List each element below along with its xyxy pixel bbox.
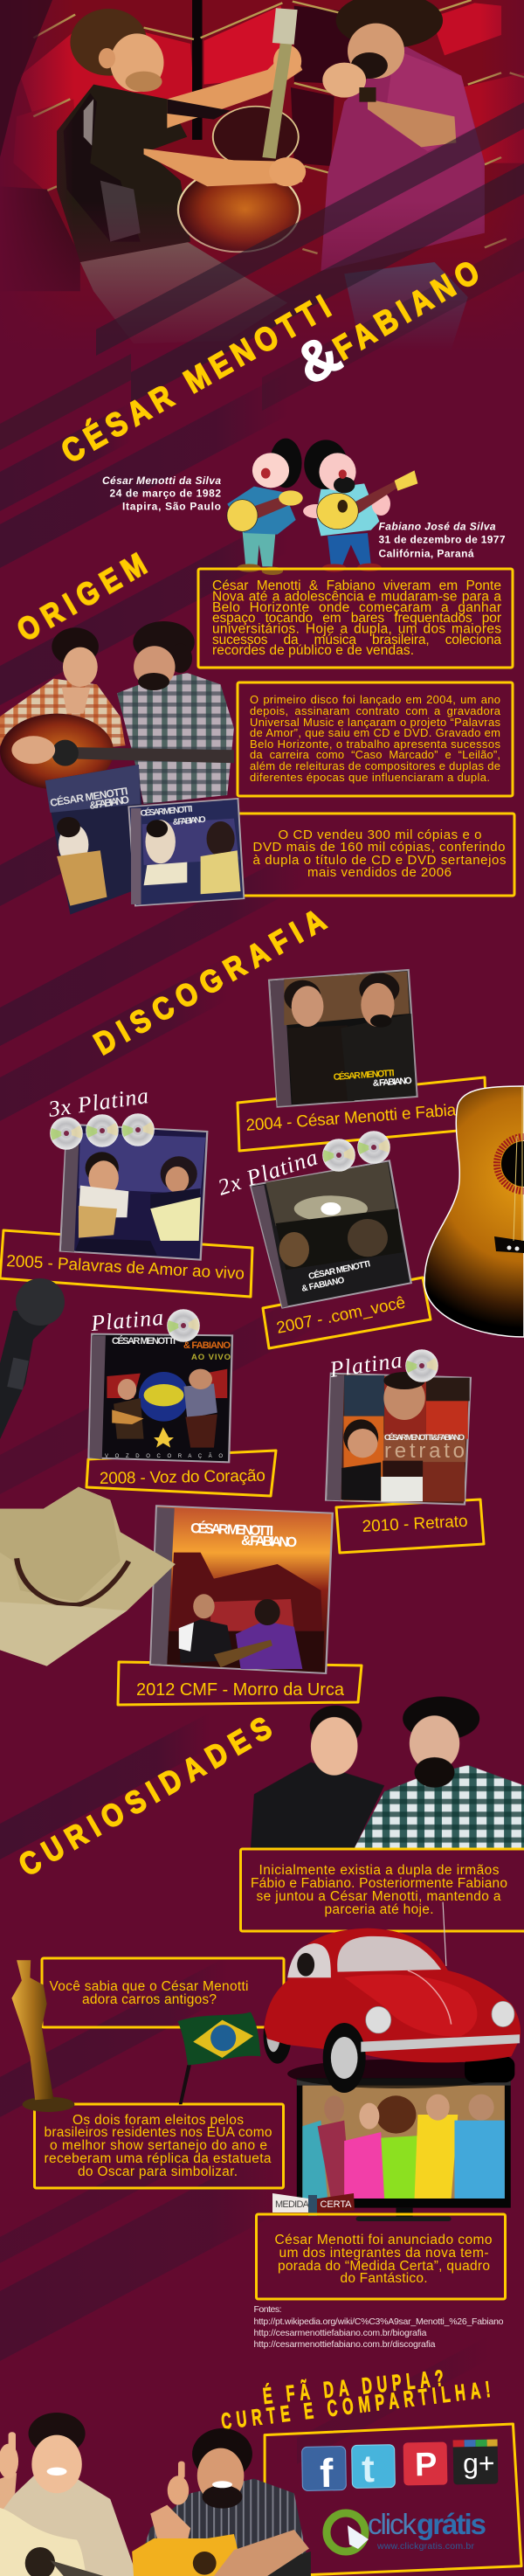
- cover text: 2004: & FABIANO: [372, 1076, 412, 1089]
- cover text: 2007: CÉSAR MENOTTI: [307, 1257, 371, 1282]
- cover text: 2008: [105, 1335, 231, 1459]
- photo: duo in jacket and plaid: [251, 1697, 524, 1848]
- album: 2012: [150, 1506, 333, 1673]
- sources: http://cesarmenottiefabiano.com.br/biografia: [253, 2328, 427, 2338]
- icon: Twitter: t: [362, 2448, 375, 2490]
- DVD case: [128, 799, 244, 906]
- icon: big acoustic guitar: [424, 1086, 524, 1337]
- cartoon: Cesar: [227, 439, 303, 575]
- caption: 2004: 2004 - César Menotti e Fabiano: [245, 1100, 475, 1135]
- panel: origem 1: Belo Horizonte onde começaram a ganhar: [212, 600, 501, 615]
- panel: curiosidade 4: porada do “Medida Certa”, quadro: [278, 2259, 490, 2274]
- platinum disc: 2010: [405, 1349, 438, 1382]
- caption: 2012: [118, 1662, 362, 1705]
- Cesar plaid: [0, 627, 234, 789]
- birth info: Fabiano: 31 de dezembro de 1977: [379, 533, 506, 545]
- cover text: 2012: [190, 1520, 297, 1550]
- birth info: César: [102, 474, 221, 512]
- panel: curiosidade 1: parceria até hoje.: [325, 1902, 433, 1917]
- logo: Medida Certa: CERTA: [320, 2199, 352, 2210]
- television with Medida Certa scene: [297, 2078, 511, 2221]
- caption: 2008: [86, 1451, 276, 1496]
- caption: 2008: 2008 - Voz do Coração: [100, 1467, 265, 1488]
- panel: origem 2: além de releituras de compositores e duplas de: [250, 759, 500, 772]
- panel: origem 2: Universal Music e lançaram o projeto “Palavras: [250, 716, 501, 729]
- panel: origem 2: O primeiro disco foi lançado em 2004, um ano: [250, 693, 500, 706]
- panel: curiosidade 1: Inicialmente existia a dupla de irmãos: [259, 1863, 500, 1878]
- icon: Facebook: f: [320, 2450, 334, 2496]
- panel: curiosidade 1: se juntou a César Menotti, mantendo a: [257, 1889, 501, 1904]
- Fabiano plaid: [117, 621, 234, 804]
- photo: duo with guitar: [0, 621, 234, 804]
- sources: Fontes:: [253, 2304, 281, 2315]
- stage backdrop: [0, 0, 524, 350]
- heading: Origem: ORIGEM: [11, 547, 153, 648]
- cover text: 2010: retrato: [384, 1439, 465, 1463]
- panel: origem 2: [238, 682, 513, 796]
- cover text: 2008: AO VIVO: [191, 1353, 231, 1362]
- panel: curiosidade 3: o melhor show sertanejo do ano e: [50, 2138, 267, 2153]
- icon: Brazilian flag: [178, 2012, 261, 2104]
- caption: 2007: [263, 1278, 431, 1348]
- logo: clickgrátis: [327, 2508, 486, 2552]
- title: César Menotti & Fabiano: [55, 253, 486, 470]
- birth info: César: César Menotti da Silva: [102, 474, 221, 487]
- cover text: Palavras de amor: CÉSAR MENOTTI: [140, 803, 193, 819]
- panel: origem 1: sucessos da música brasileira, coleciona: [212, 633, 501, 647]
- album: Palavras de amor CD and DVD: [45, 765, 244, 915]
- panel: origem 2: de Amor”, que saiu em CD e DVD. Gravado em: [250, 726, 500, 739]
- logo: Medida Certa: [272, 2193, 355, 2216]
- label: 3x Platina: 3x Platina: [46, 1083, 150, 1122]
- caption: 2012: 2012 CMF - Morro da Urca: [136, 1680, 345, 1700]
- sources: http://cesarmenottiefabiano.com.br/discografia: [253, 2339, 436, 2350]
- panel: curiosidade 2: adora carros antigos?: [82, 1992, 217, 2007]
- panel: origem 1: Nova até a adolescência e mudaram-se para a: [212, 589, 501, 605]
- diagonal bands over photo: [0, 102, 524, 450]
- panel: curiosidade 3: do Oscar para simbolizar.: [78, 2164, 238, 2179]
- panel: origem 3: DVD mais de 160 mil cópias, conferindo: [253, 840, 505, 855]
- panel: curiosidade 4: do Fantástico.: [341, 2271, 428, 2286]
- CD booklet: [45, 765, 147, 915]
- cover text: Palavras de amor: & FABIANO: [172, 815, 206, 828]
- album: 2010: [326, 1372, 471, 1505]
- title: César Menotti & Fabiano: CÉSAR MENOTTI: [55, 287, 337, 470]
- panel: origem 1: [198, 569, 513, 668]
- hero photo of the duo on stage: [0, 0, 524, 350]
- cover text: 2008: CÉSAR MENOTTI: [112, 1335, 176, 1347]
- panel: curiosidade 2: Você sabia que o César Menotti: [49, 1979, 248, 1994]
- album: 2007: [251, 1160, 411, 1308]
- cover text: 2004: CÉSAR MENOTTI: [333, 1067, 395, 1083]
- caption: 2004: [238, 1077, 486, 1151]
- photo: César thumbs up: [0, 2413, 137, 2576]
- logo: clickgrátis: www.clickgratis.com.br: [376, 2541, 475, 2552]
- cartoon: Fabiano: [303, 440, 417, 572]
- logo: clickgrátis: grátis: [417, 2508, 486, 2540]
- icon: microphone: [0, 1278, 65, 1439]
- cover text: 2007: & FABIANO: [300, 1276, 346, 1294]
- Fabiano figure: [321, 0, 485, 350]
- cover text: 2012: & FABIANO: [241, 1534, 297, 1550]
- birth info: César: Itapira, São Paulo: [122, 500, 221, 512]
- birth info: César: 24 de março de 1982: [110, 488, 221, 500]
- caption: 2007: 2007 - .com_você: [275, 1293, 407, 1338]
- acoustic guitar: [144, 8, 306, 252]
- panel: curiosidade 2: [42, 1958, 284, 2027]
- birth info: Fabiano: Fabiano José da Silva: [379, 521, 496, 533]
- sources: [253, 2304, 504, 2350]
- hero photo fades: [0, 0, 524, 351]
- panel: origem 2: depois, assinaram contrato com a gravadora: [250, 704, 501, 717]
- label: 2x Platina: 2x Platina: [215, 1145, 321, 1201]
- cover text: 2008: & FABIANO: [183, 1340, 231, 1351]
- heading: Curiosidades: CURIOSIDADES: [13, 1711, 278, 1883]
- birth info: Fabiano: Califórnia, Paraná: [379, 547, 474, 559]
- panel: origem 2: da carreira como “Caso Marcado” e “Leilão”,: [250, 748, 500, 761]
- cover text: 2012: CÉSAR MENOTTI: [190, 1520, 273, 1539]
- birth info: Fabiano: [379, 521, 506, 559]
- right man: [355, 1697, 524, 1848]
- panel: origem 3: O CD vendeu 300 mil cópias e o: [278, 828, 482, 842]
- album: 2005: [60, 1125, 207, 1260]
- panel: curiosidade 3: brasileiros residentes nos EUA como: [44, 2125, 272, 2140]
- photo: Fabiano thumbs up: [132, 2428, 311, 2576]
- icon: Google Plus: g+: [463, 2448, 495, 2479]
- cover text: 2004: [333, 1067, 412, 1089]
- icon: Google Plus: [453, 2440, 498, 2484]
- icon: Pinterest: [403, 2442, 447, 2485]
- call to action heading: CURTE E COMPARTILHA!: [220, 2376, 492, 2434]
- logo: clickgrátis: click: [368, 2508, 417, 2540]
- panel: origem 3: mais vendidos de 2006: [307, 865, 452, 880]
- panel: curiosidade 3: Os dois foram eleitos pelos: [72, 2113, 244, 2128]
- panel: curiosidade 4: César Menotti foi anunciado como: [274, 2233, 493, 2247]
- icon: red Beetle car: [264, 1902, 521, 2093]
- cover text: Palavras de amor: CÉSAR MENOTTI: [49, 784, 128, 809]
- panel: share box: [265, 2424, 521, 2575]
- panel: origem 2: diferentes épocas que influenciaram a dupla.: [250, 771, 490, 784]
- caption: 2005: [0, 1230, 252, 1297]
- caption: 2010: [336, 1499, 484, 1553]
- label: Platina 2010: Platina: [328, 1347, 403, 1382]
- icon: straw hat: [0, 1487, 176, 1666]
- panel: origem 3: [229, 814, 514, 896]
- panel: curiosidade 1: Fábio e Fabiano. Posteriormente Fabiano: [251, 1876, 507, 1891]
- platinum discs: 2007: [323, 1131, 390, 1171]
- label: Platina 2008: Platina: [89, 1305, 164, 1336]
- album: 2004: [269, 970, 417, 1107]
- cover text: Palavras de amor: & FABIANO: [88, 793, 130, 812]
- panel: origem 3: à dupla o título de CD e DVD sertanejos: [253, 853, 507, 868]
- panel: curiosidade 4: [257, 2214, 505, 2299]
- caption: 2005: 2005 - Palavras de Amor ao vivo: [6, 1252, 245, 1284]
- panel: curiosidade 1: [241, 1849, 524, 1931]
- left man: [251, 1706, 384, 1848]
- caption: 2010: 2010 - Retrato: [362, 1513, 468, 1536]
- heading: Discografia: DISCOGRAFIA: [89, 903, 332, 1062]
- panel: curiosidade 3: receberam uma réplica da estatueta: [44, 2151, 272, 2166]
- icon: Pinterest: P: [415, 2447, 438, 2483]
- icon: Facebook: [302, 2447, 347, 2496]
- icon: Oscar statuette: [11, 1960, 74, 2112]
- cover text: 2008: V O Z D O C O R A Ç Ã O: [105, 1453, 223, 1459]
- diagonal background stripes: [0, 371, 489, 2464]
- album: 2008: [88, 1334, 232, 1462]
- panel: origem 1: César Menotti & Fabiano viveram em Ponte: [212, 578, 501, 593]
- platinum discs: 2005: [51, 1113, 154, 1150]
- cover text: Palavras de amor: [49, 784, 206, 828]
- cover text: 2007: [300, 1257, 371, 1294]
- icon: Twitter: [352, 2445, 395, 2490]
- title: César Menotti & Fabiano: &: [285, 322, 351, 397]
- panel: curiosidade 3: [35, 2104, 283, 2188]
- panel: origem 1: recordes de público e de vendas.: [212, 643, 414, 658]
- title: César Menotti & Fabiano: FABIANO: [328, 253, 486, 367]
- panel: curiosidade 4: um dos integrantes da nova tem-: [279, 2246, 489, 2261]
- sources: http://pt.wikipedia.org/wiki/C%C3%A9sar_Menotti_%26_Fabiano: [253, 2316, 504, 2327]
- Cesar Menotti figure: [57, 9, 302, 343]
- panel: origem 1: espaço tocando em bares frequentados por: [212, 611, 501, 626]
- cartoon of the duo: [227, 439, 417, 575]
- cover text: 2010: CÉSAR MENOTTI & FABIANO: [384, 1433, 465, 1443]
- platinum disc: 2008: [168, 1309, 199, 1342]
- panel: origem 2: Belo Horizonte, o trabalho apresenta sucessos: [250, 737, 501, 751]
- panel: origem 1: universitários. Hoje a dupla, um dos maiores: [212, 622, 501, 636]
- logo: Medida Certa: MEDIDA: [275, 2199, 310, 2210]
- call to action heading: É FÃ DA DUPLA?: [262, 2365, 445, 2409]
